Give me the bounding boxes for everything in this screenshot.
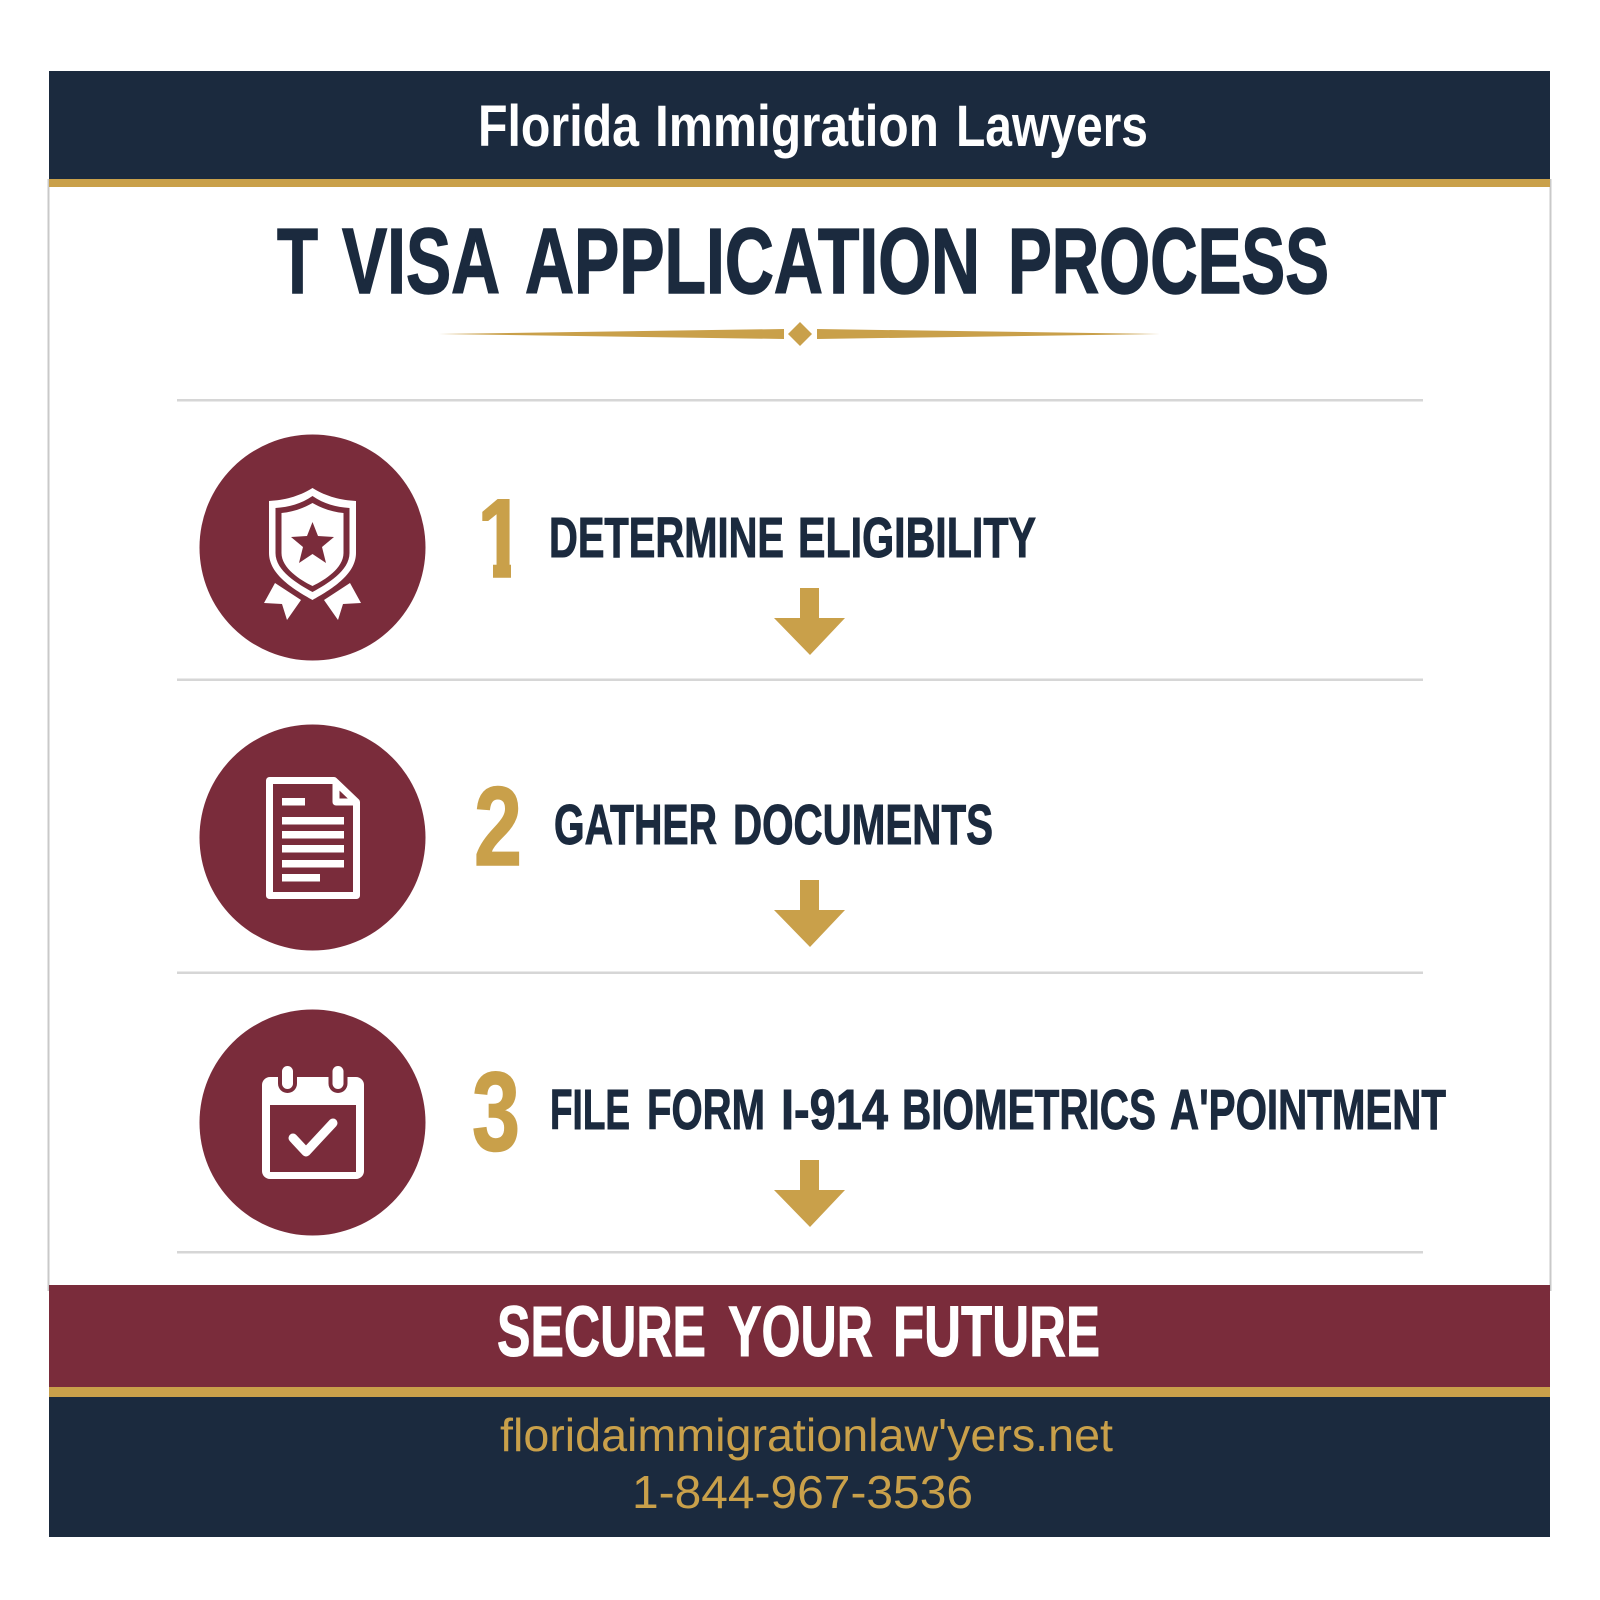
icon: shield with star and ribbons <box>200 434 426 660</box>
step 1 <box>200 434 1036 660</box>
step label 2: GATHER <box>554 793 717 857</box>
header banner <box>49 71 1550 187</box>
row separators <box>177 399 1423 1254</box>
step label 1: DETERMINE <box>549 506 784 570</box>
header firm name <box>478 94 1148 159</box>
arrow down <box>774 880 845 947</box>
call-to-action text: SECURE <box>497 1293 706 1372</box>
step number 2: 2 <box>474 764 522 889</box>
step label 1: ELIGIBILITY <box>798 506 1036 570</box>
title: APPLICATION <box>525 209 980 313</box>
arrow down <box>774 1160 845 1227</box>
step label 3: BIOMETRICS <box>902 1078 1156 1142</box>
step label 3: A'POINTMENT <box>1170 1078 1446 1142</box>
call-to-action text: FUTURE <box>893 1293 1100 1372</box>
icon: document <box>200 724 426 950</box>
step label 2 <box>554 793 993 857</box>
step label 3: FILE <box>550 1078 630 1142</box>
step label 3: I-914 <box>781 1078 888 1142</box>
arrow down <box>774 588 845 655</box>
step label 2: DOCUMENTS <box>733 793 993 857</box>
step 3 <box>200 1010 1446 1236</box>
title: T <box>277 209 318 313</box>
header firm name: Florida <box>478 94 640 159</box>
website: floridaimmigrationlaw'yers.net <box>500 1409 1113 1461</box>
contact footer <box>49 1397 1550 1537</box>
step label 3 <box>550 1078 1446 1142</box>
call-to-action text: YOUR <box>728 1293 873 1372</box>
title divider ornament <box>439 322 1160 346</box>
call-to-action band <box>49 1285 1550 1397</box>
header firm name: Lawyers <box>956 94 1148 159</box>
step label 3: FORM <box>647 1078 765 1142</box>
icon: calendar with check <box>200 1010 426 1236</box>
title: VISA <box>342 209 500 313</box>
step label 1 <box>549 506 1036 570</box>
step number 3: 3 <box>472 1049 520 1174</box>
title <box>277 209 1329 313</box>
step number 1: 1 <box>477 476 525 601</box>
title: PROCESS <box>1008 209 1329 313</box>
phone number: 1-844-967-3536 <box>632 1466 973 1518</box>
step 2 <box>200 724 993 950</box>
call-to-action text <box>497 1293 1100 1372</box>
header firm name: Immigration <box>655 94 939 159</box>
